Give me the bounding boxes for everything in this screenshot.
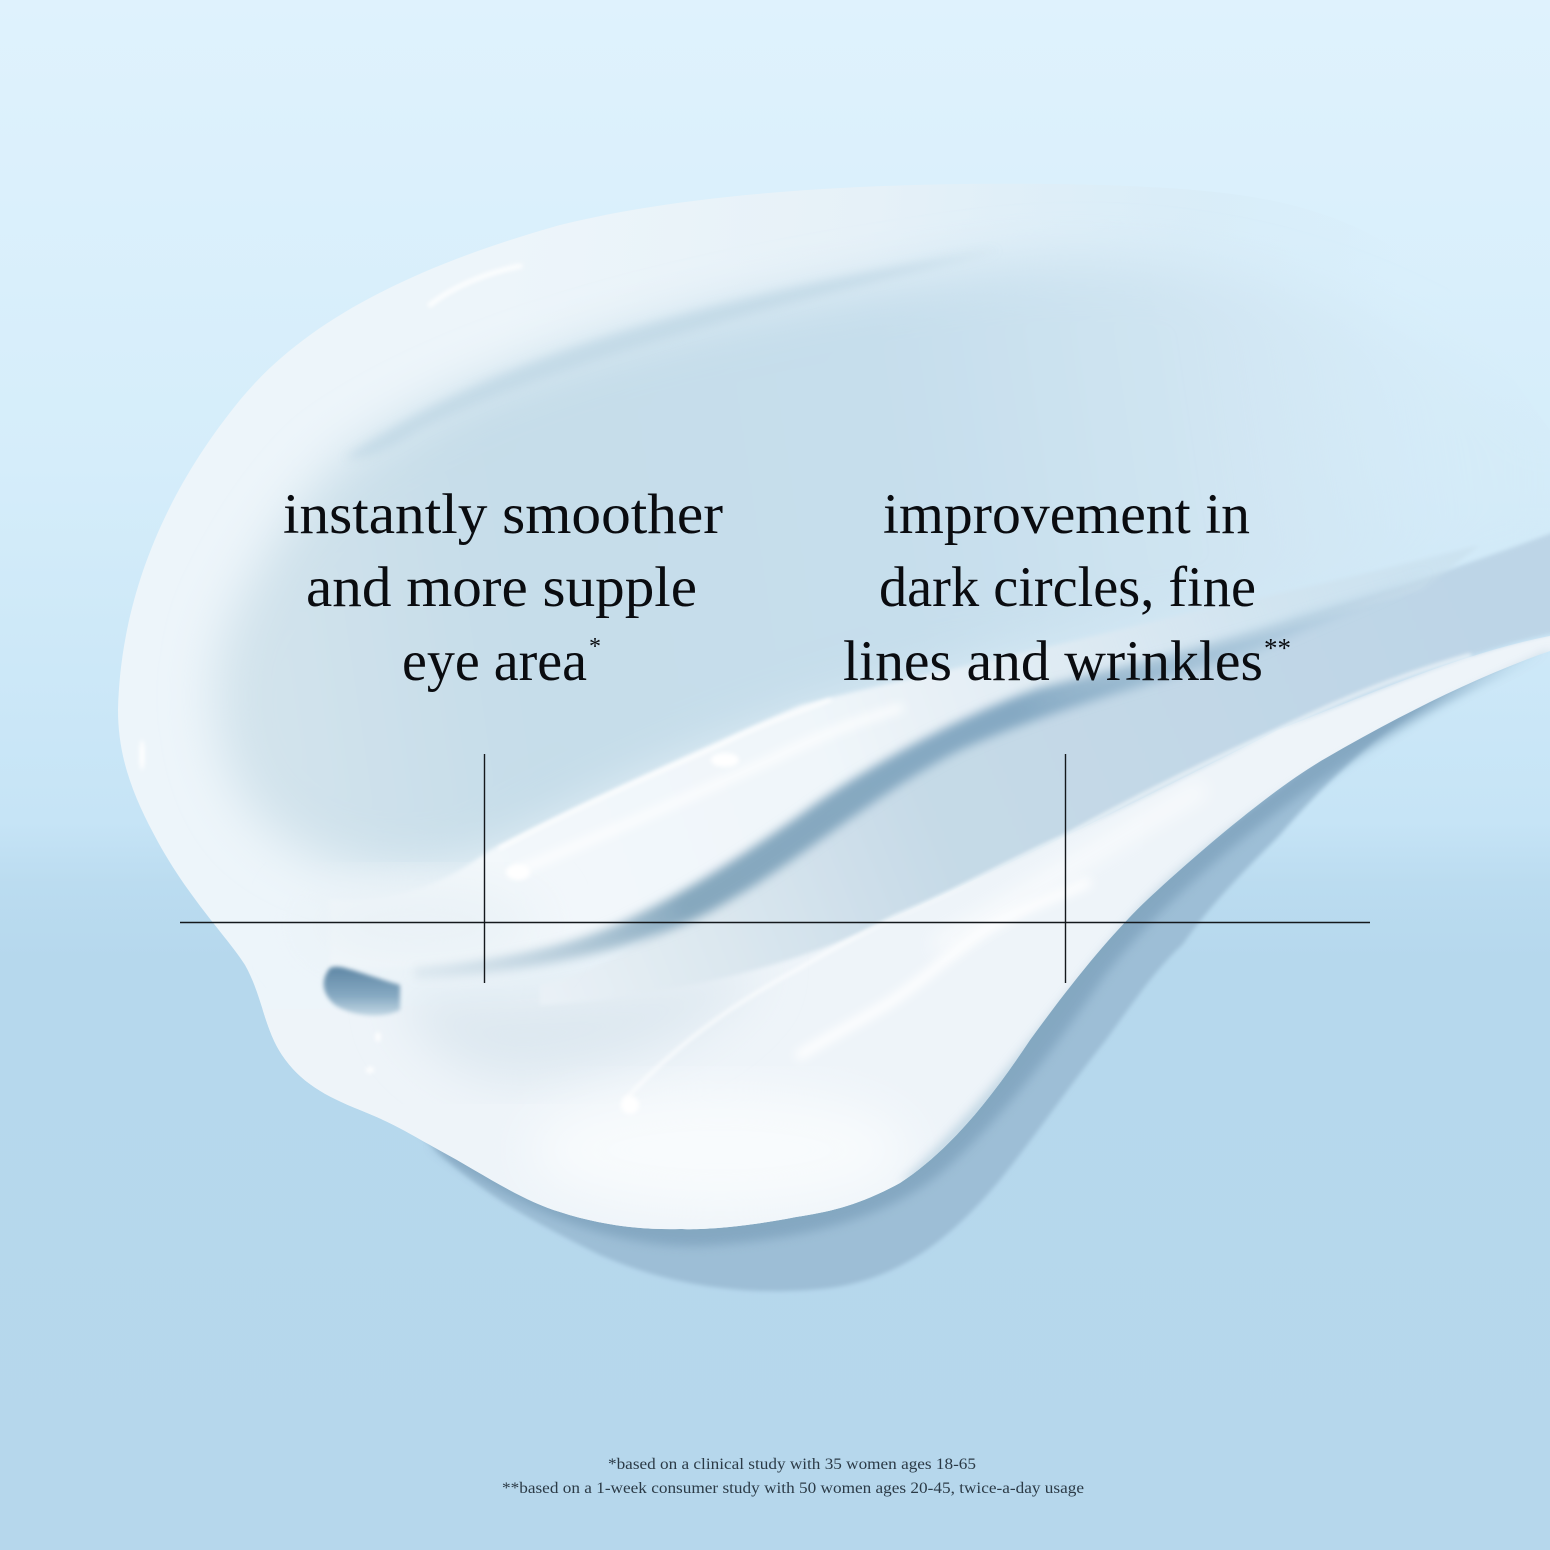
- callout: instantly smoother: [283, 483, 723, 693]
- lower white band: [262, 636, 1550, 1230]
- callout: instantly smoother: and more supple: [306, 556, 697, 619]
- callout: improvement in dark circles: lines and wrinkles: [843, 630, 1263, 693]
- callout: instantly smoother: *: [589, 634, 601, 660]
- callout: improvement in dark circles: improvement in: [883, 483, 1250, 546]
- cream swatch: [118, 184, 1550, 1291]
- callout: improvement in dark circles: dark circles, fine: [879, 556, 1256, 619]
- crosshair lines: [180, 754, 1370, 983]
- basin sharp shade under upper rim: [352, 260, 938, 458]
- contact shadow: [430, 651, 1550, 1246]
- mid basin: [658, 533, 1550, 978]
- main basin: [204, 256, 1217, 878]
- callout: instantly smoother: instantly smoother: [283, 483, 723, 546]
- wide ridge highlight: [833, 706, 899, 732]
- lower wide highlight: [800, 883, 1087, 1055]
- lower thin highlight: [658, 652, 1472, 1066]
- upper white ridge: [444, 630, 1136, 934]
- callout: instantly smoother: eye area: [402, 630, 587, 693]
- cream surface details: [140, 250, 1550, 1250]
- footnotes: [502, 1456, 1084, 1497]
- soft shade below groove: [420, 982, 724, 1079]
- lower rim soft shading: [900, 651, 1550, 1183]
- footnotes: **based on a 1-week consumer study with 50 women ages 20-45, twice-a-day usage: [502, 1480, 1084, 1497]
- cream hole: [324, 967, 400, 1015]
- thin ridge highlights: [500, 700, 830, 848]
- callout: improvement in dark circles: **: [1264, 633, 1291, 663]
- upper rim highlight: [430, 266, 520, 305]
- cast shadow: [400, 648, 1550, 1291]
- cream base: [118, 184, 1550, 1229]
- callout: improvement in dark circles: [843, 483, 1291, 693]
- lower broad highlight: [940, 790, 1200, 945]
- footnotes: *based on a clinical study with 35 women ages 18-65: [608, 1456, 976, 1473]
- soft blend at ridge left end: [379, 914, 461, 936]
- glint spots: [140, 740, 739, 1114]
- bright belly of cream: [576, 1115, 864, 1185]
- groove shadow: [418, 600, 1362, 978]
